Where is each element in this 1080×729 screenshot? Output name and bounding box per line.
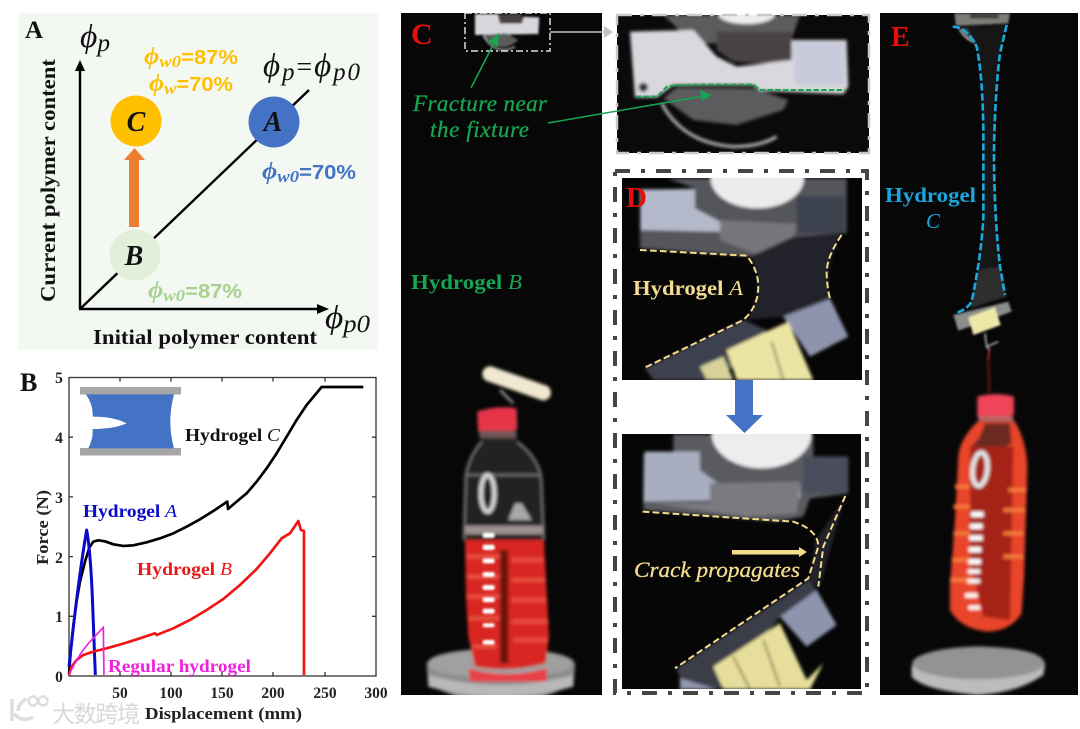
diagonal equation: ϕ — [263, 48, 280, 84]
curve: regular hydrogel — [69, 627, 104, 675]
label B water content: =87% — [185, 281, 242, 303]
stretched gel — [953, 13, 1012, 360]
x axis title: Displacement (mm) — [145, 704, 302, 723]
watermark: 大数跨境 — [52, 701, 140, 727]
label C water content — [144, 44, 238, 98]
x axis with arrow — [79, 304, 329, 314]
panel label E: E — [891, 22, 910, 53]
y tick labels: 0 — [55, 669, 63, 686]
curve: hydrogel B — [69, 521, 304, 675]
y tick labels: 3 — [55, 490, 63, 507]
y axis with arrow — [75, 60, 85, 309]
diagonal equation: ϕ — [314, 48, 331, 84]
inset: cracked specimen schematic — [80, 387, 181, 456]
x tick labels — [112, 685, 388, 702]
label fracture: Fracture near — [412, 91, 548, 116]
label hydrogel C: Hydrogel — [885, 183, 976, 207]
panel label C: C — [411, 18, 433, 51]
top fixture thumbnail — [475, 14, 539, 50]
watermark — [12, 696, 140, 727]
hanging bottle and disk — [912, 360, 1045, 695]
circle A — [248, 96, 300, 148]
label regular hydrogel: Regular hydrogel — [108, 656, 251, 676]
diagonal line — [80, 90, 309, 309]
y tick labels: 1 — [55, 609, 63, 626]
thumbnail selection box — [465, 13, 550, 51]
label B water content: ϕ — [148, 278, 162, 304]
label C water content: =70% — [177, 74, 233, 96]
label A water content: ϕ — [262, 159, 276, 185]
x tick labels: 100 — [159, 685, 183, 702]
y tick labels: 2 — [55, 550, 63, 567]
diagonal equation: p — [280, 59, 294, 86]
label C water content: w0 — [159, 52, 182, 71]
label C water content: ϕ — [149, 71, 163, 97]
circle C: C — [127, 107, 146, 138]
bottle on disk — [427, 374, 575, 698]
y axis symbol: ϕ — [80, 19, 97, 55]
green arrow to thumbnail — [471, 33, 499, 88]
label C water content: ϕ — [144, 44, 158, 70]
x axis symbol: p0 — [341, 311, 371, 338]
y tick labels: 4 — [55, 430, 63, 447]
label hydrogel C: C — [926, 209, 941, 233]
x tick labels: 250 — [313, 685, 337, 702]
y tick labels: 5 — [55, 370, 63, 387]
y axis symbol: p — [95, 30, 110, 57]
curve: hydrogel A — [69, 530, 95, 675]
grey arrow to inset — [550, 26, 613, 38]
circle C — [110, 96, 162, 146]
blue down arrow — [726, 380, 763, 433]
upper photo: hydrogel A — [622, 178, 862, 380]
panel A: polymer content diagram — [18, 13, 378, 350]
x tick labels: 300 — [364, 685, 388, 702]
curve: hydrogel C — [69, 387, 363, 675]
plot frame and ticks — [69, 378, 376, 676]
orange arrow B to C — [124, 148, 145, 227]
lower photo: crack propagates — [622, 434, 861, 689]
diagonal equation: = — [296, 52, 312, 83]
panel label B: B — [20, 368, 37, 397]
diagonal equation: p0 — [331, 59, 360, 86]
label hydrogel B: Hydrogel B — [137, 559, 232, 579]
panel D: crack propagation — [615, 148, 867, 693]
inset border — [617, 15, 869, 153]
panel C: hydrogel B photo — [401, 13, 602, 698]
panel label D: D — [626, 182, 647, 214]
x axis symbol: ϕ — [325, 300, 342, 336]
x axis title: Initial polymer content — [93, 325, 318, 349]
label hydrogel A: Hydrogel A — [83, 501, 178, 521]
label hydrogel B: Hydrogel B — [411, 270, 522, 294]
panel B: force displacement chart — [20, 368, 388, 723]
circle A: A — [262, 107, 282, 138]
panel E: hydrogel C photo — [880, 13, 1078, 695]
label A water content: w0 — [277, 167, 300, 186]
label A water content: =70% — [299, 162, 356, 184]
label fracture — [412, 91, 548, 142]
circle B — [110, 230, 160, 280]
label crack propagates: Crack propagates — [634, 557, 800, 582]
x tick labels: 150 — [210, 685, 234, 702]
label hydrogel C — [885, 188, 976, 228]
label fracture: the fixture — [430, 117, 529, 142]
circle B: B — [124, 241, 143, 272]
label C water content: w — [164, 79, 177, 98]
y axis title: Current polymer content — [36, 58, 60, 302]
label hydrogel A: Hydrogel A — [633, 276, 743, 300]
x tick labels: 50 — [112, 685, 128, 702]
dash-dot frame — [615, 171, 867, 693]
label B water content: w0 — [163, 286, 186, 305]
crack arrow — [732, 547, 807, 557]
y axis title: Force (N) — [33, 490, 52, 565]
x tick labels: 200 — [261, 685, 285, 702]
y tick labels — [55, 370, 63, 686]
panel label A: A — [25, 17, 43, 44]
label hydrogel C: Hydrogel C — [185, 425, 281, 445]
green arrow to inset — [548, 90, 712, 123]
panel: zoomed fracture inset — [617, 4, 869, 153]
label C water content: =87% — [181, 47, 238, 69]
